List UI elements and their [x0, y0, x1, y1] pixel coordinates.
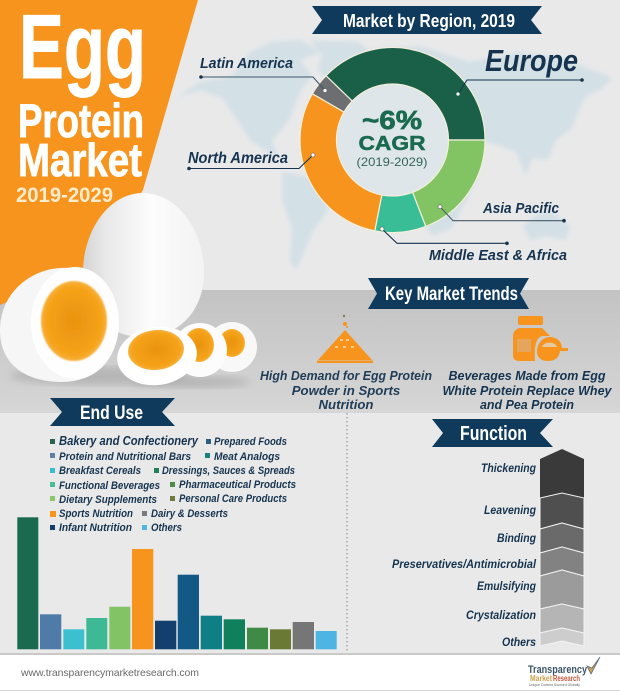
logo: Market: [530, 674, 552, 683]
function labels: Binding: [497, 531, 537, 545]
title: [16, 0, 146, 207]
halved egg: [0, 267, 119, 382]
CAGR label: (2019-2029): [356, 155, 428, 169]
legend: end use: Prepared Foods: [214, 436, 287, 448]
legend: end use: Others: [151, 522, 182, 534]
legend: end use: [50, 433, 296, 534]
logo: Unique Content Sourced Globally: [529, 683, 580, 687]
callout: Europe: Europe: [485, 43, 578, 78]
legend: end use: Sports Nutrition: [59, 508, 133, 520]
callout: Asia Pacific: [438, 201, 566, 222]
legend: end use: Functional Beverages: [59, 480, 160, 492]
trend text: egg protein powder: Nutrition: [319, 397, 373, 412]
banner: end use: End Use: [80, 403, 143, 424]
legend: end use: Pharmaceutical Products: [179, 479, 296, 491]
gray band: [0, 290, 620, 413]
legend: end use: Personal Care Products: [179, 493, 287, 505]
CAGR label: ~6%: [362, 105, 422, 135]
banner: key market trends: Key Market Trends: [385, 284, 518, 305]
whole egg: [83, 193, 204, 337]
orange title panel: [0, 0, 198, 305]
legend: end use: Dietary Supplements: [59, 494, 157, 506]
legend: end use: Breakfast Cereals: [59, 465, 141, 477]
callout: Middle East & Africa: [380, 227, 567, 264]
title: 2019-2029: [16, 184, 113, 207]
legend: end use: Dairy & Desserts: [151, 508, 228, 520]
icon: protein powder pile: [317, 315, 373, 363]
function labels: Thickening: [481, 461, 537, 475]
eggs illustration: [0, 193, 257, 390]
legend: end use: Dressings, Sauces & Spreads: [162, 465, 295, 477]
segment: Middle East & Africa: [375, 192, 426, 233]
segment: North America: [300, 94, 382, 231]
function labels: [392, 461, 537, 649]
world map: [177, 40, 613, 270]
trend text: beverages: Beverages Made from Egg: [448, 368, 606, 383]
logo: [528, 657, 600, 687]
callout: Asia Pacific: Asia Pacific: [482, 201, 559, 217]
CAGR label: CAGR: [358, 133, 426, 155]
region callouts: [187, 43, 584, 264]
function arrow stack: [540, 449, 584, 646]
callout: North America: North America: [188, 150, 288, 167]
logo: Transparency: [528, 664, 588, 676]
function labels: Crystalization: [466, 608, 536, 622]
callout: Latin America: [199, 56, 327, 92]
callout: North America: [187, 150, 315, 170]
title: Protein: [18, 94, 144, 147]
segment: Asia Pacific: [413, 140, 485, 226]
banner: market by region: [312, 6, 542, 34]
trend text: egg protein powder: Powder in Sports: [292, 383, 400, 398]
legend: end use: Meat Analogs: [214, 451, 280, 463]
callout: Europe: [456, 43, 584, 96]
banner: function: Function: [460, 423, 527, 445]
website url: www.transparencymarketresearch.com: [20, 667, 199, 679]
function labels: Others: [502, 635, 536, 649]
title: Egg: [19, 0, 146, 98]
legend: end use: Infant Nutrition: [59, 522, 132, 534]
egg slices: [113, 322, 257, 390]
banner: market by region: Market by Region, 2019: [343, 11, 515, 31]
footer: [0, 653, 620, 691]
function labels: Emulsifying: [477, 579, 537, 593]
CAGR label: [356, 105, 428, 169]
banner: function: [432, 419, 553, 447]
donut chart: [300, 47, 485, 233]
logo: Research: [553, 674, 580, 683]
legend: end use: Bakery and Confectionery: [59, 433, 199, 448]
bar chart: [17, 517, 337, 649]
trend text: beverages: and Pea Protein: [480, 397, 574, 412]
title: Market: [18, 134, 142, 186]
segment: Latin America: [312, 76, 352, 112]
trend text: egg protein powder: High Demand for Egg Protein: [260, 368, 432, 383]
icon: protein tub and scoop: [513, 316, 568, 361]
trend text: beverages: White Protein Replace Whey: [442, 383, 612, 398]
function labels: Preservatives/Antimicrobial: [392, 557, 537, 571]
callout: Middle East & Africa: Middle East & Africa: [429, 247, 567, 264]
callout: Latin America: Latin America: [200, 56, 293, 72]
banner: end use: [50, 398, 175, 426]
function labels: Leavening: [484, 503, 537, 517]
banner: key market trends: [368, 278, 529, 309]
legend: end use: Protein and Nutritional Bars: [59, 451, 191, 463]
segment: Europe: [326, 47, 485, 140]
